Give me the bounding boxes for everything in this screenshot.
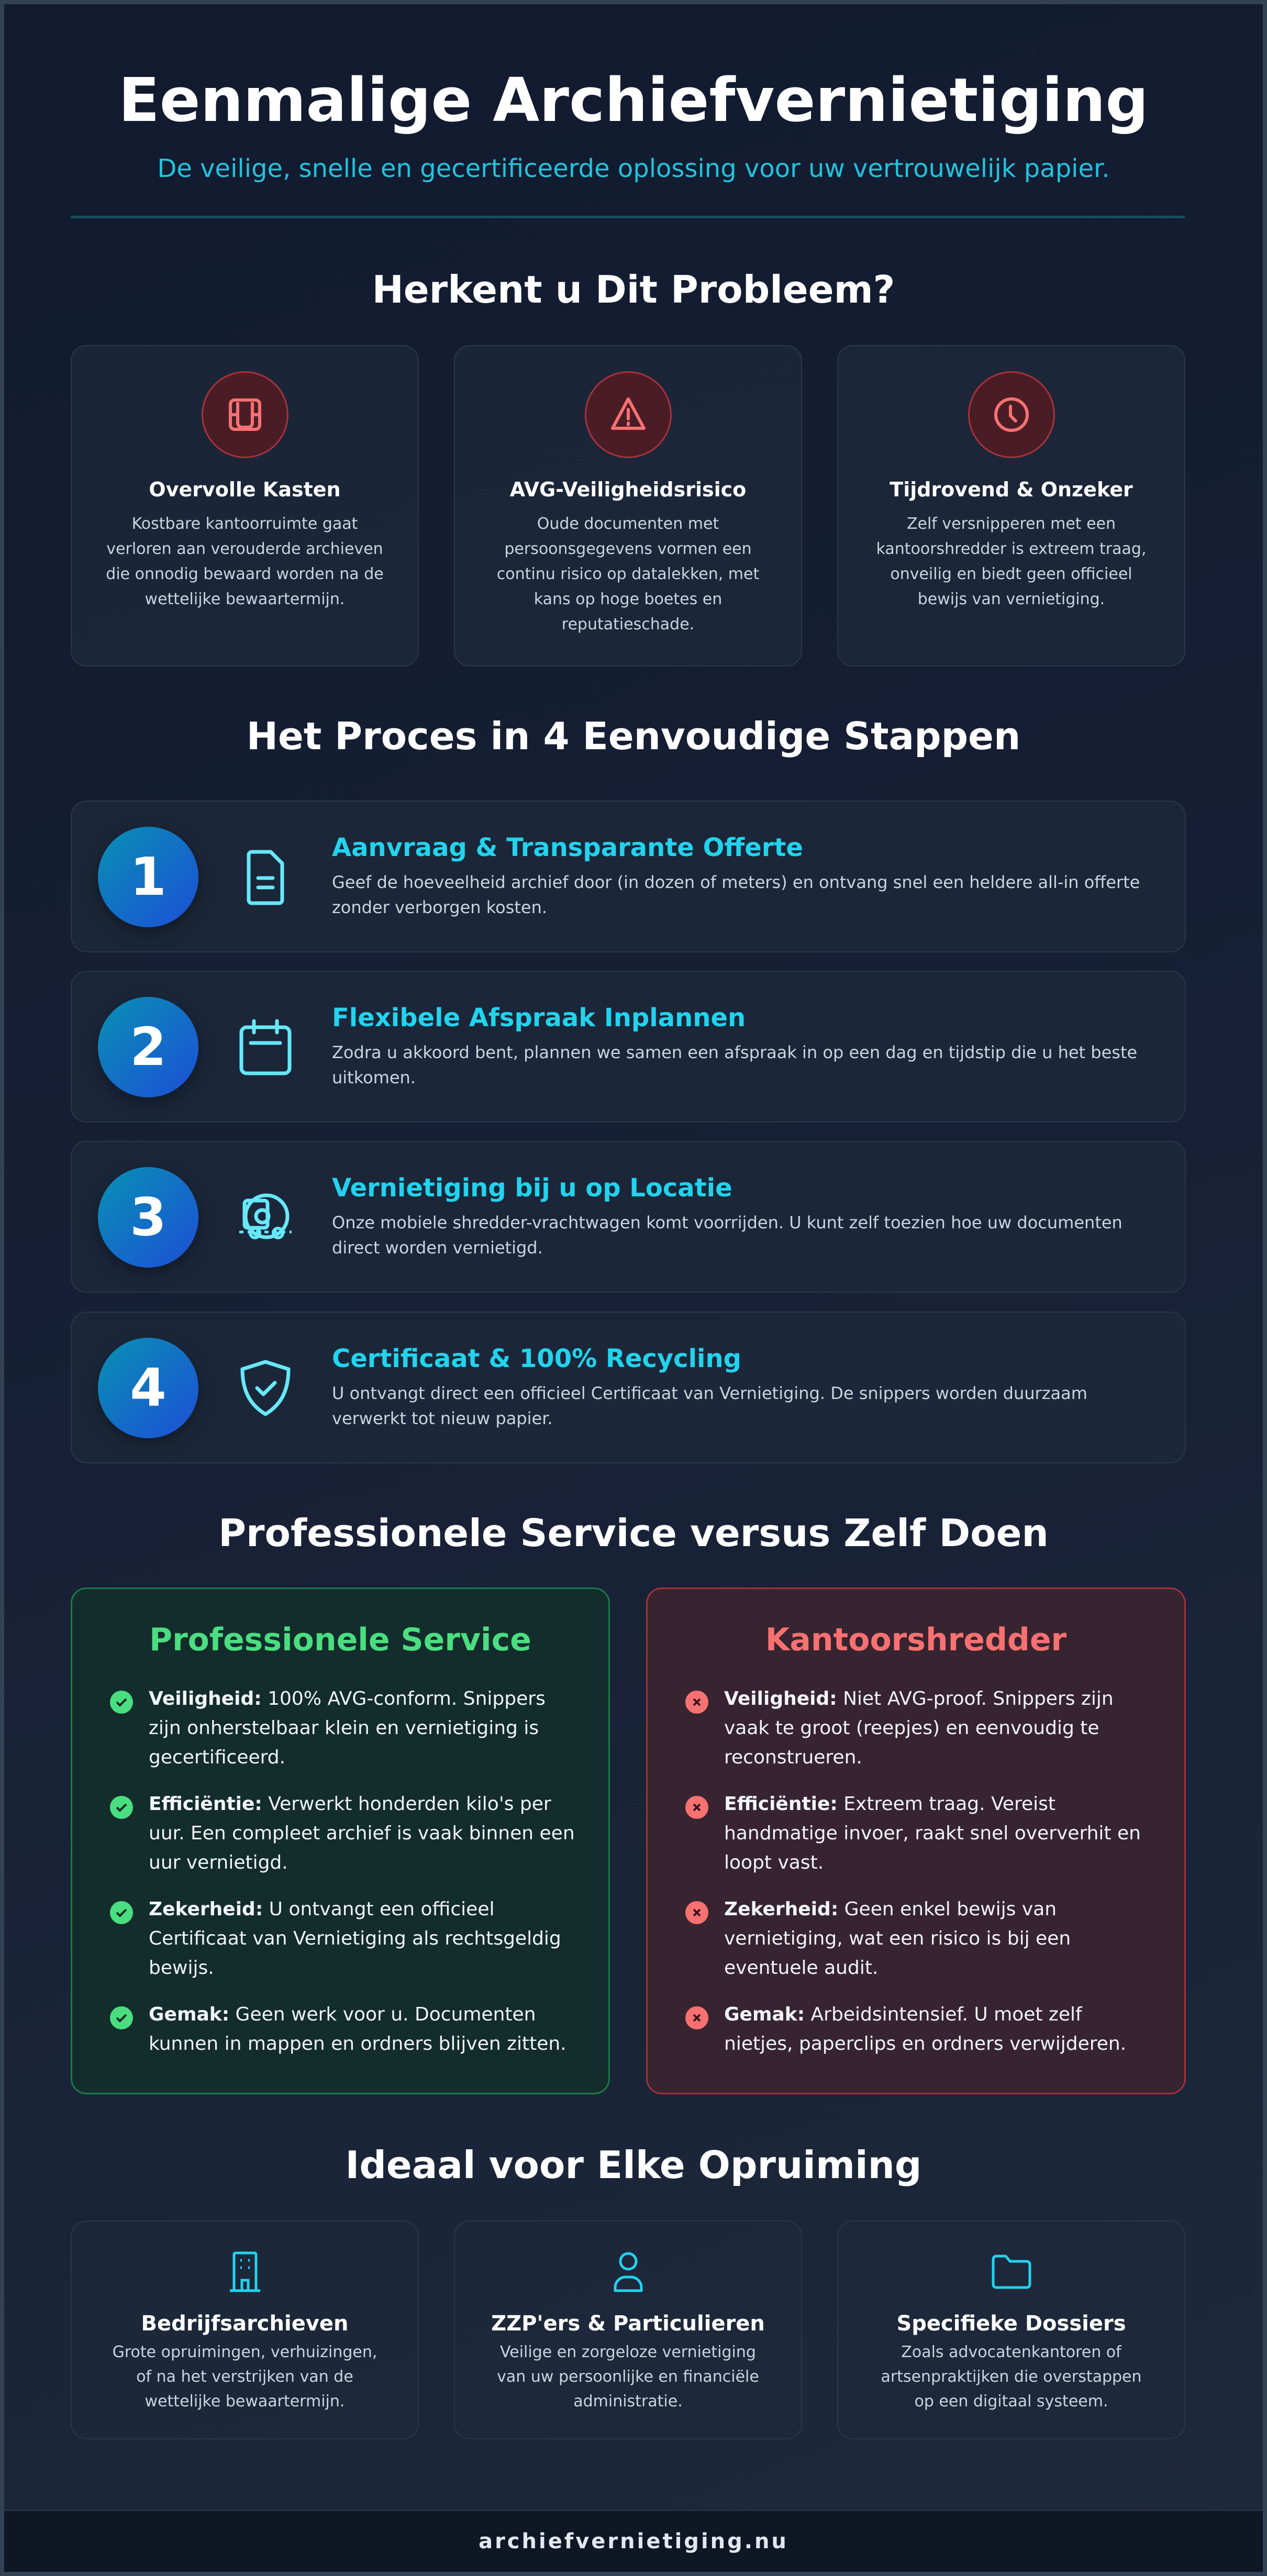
heading: process: Het Proces in 4 Eenvoudige Stappen <box>247 714 1020 758</box>
item list red: nietjes, paperclips en ordners verwijderen. <box>724 2033 1126 2055</box>
icon: folder <box>992 2255 1031 2289</box>
icon: clock <box>968 371 1054 458</box>
card: Bedrijfsarchieven <box>71 2220 419 2439</box>
item list red: Zekerheid: Geen enkel bewijs van vernietiging, wat een risico is bij een eventuele audit. <box>724 1898 1071 1979</box>
item list red: Veiligheid: Niet AVG-proof. Snippers zijn vaak te groot (reepjes) en eenvoudig te reconstrueren. <box>724 1688 1114 1768</box>
step 1 <box>71 801 1186 952</box>
step 1: Aanvraag & Transparante Offerte <box>332 833 803 862</box>
card: AVG <box>454 345 802 667</box>
panel: kantoorshredder <box>646 1587 1186 2094</box>
card: Overvolle Kasten: Kostbare kantoorruimte gaat verloren aan verouderde archieven die onnodig bewaard worden na de wettelijke bewaartermijn. <box>106 515 384 608</box>
heading: comparison: Professionele Service versus Zelf Doen <box>218 1511 1049 1555</box>
card: ZZP: van uw persoonlijke en financiële <box>497 2368 759 2386</box>
card: Dossiers <box>837 2220 1185 2439</box>
step 4: U ontvangt direct een officieel Certificaat van Vernietiging. De snippers worden duurzaam verwerkt tot nieuw papier. <box>332 1383 1087 1428</box>
step 4: Certificaat & 100% Recycling <box>332 1344 741 1373</box>
card: Overvolle Kasten: Overvolle Kasten <box>149 478 341 501</box>
icon: warning <box>584 371 671 458</box>
step 1: 1 <box>130 846 166 907</box>
panel: professional service: Professionele Service <box>149 1622 531 1658</box>
step 3 <box>71 1141 1186 1293</box>
card: ZZP <box>454 2220 802 2439</box>
icon: cabinet <box>201 371 288 458</box>
panel: steps <box>71 801 1186 1463</box>
step 2: Flexibele Afspraak Inplannen <box>332 1003 746 1032</box>
panel: use case cards <box>71 2220 1185 2439</box>
item list green: Zekerheid: U ontvangt een officieel Certificaat van Vernietiging als rechtsgeldig bewijs. <box>149 1898 561 1979</box>
card: Bedrijfsarchieven: wettelijke bewaartermijn. <box>145 2392 344 2411</box>
card: Tijdrovend <box>837 345 1185 667</box>
item list green: Gemak: Geen werk voor u. Documenten kunnen in mappen en ordners blijven zitten. <box>149 2004 566 2055</box>
item list red <box>685 1688 1141 2055</box>
step 2: Zodra u akkoord bent, plannen we samen een afspraak in op een dag en tijdstip die u het beste uitkomen. <box>332 1042 1137 1087</box>
step 3: Onze mobiele shredder-vrachtwagen komt voorrijden. U kunt zelf toezien hoe uw documenten direct worden vernietigd. <box>332 1213 1122 1258</box>
icon: building <box>230 2251 260 2292</box>
icon: shield <box>241 1360 290 1416</box>
card: Dossiers: Zoals advocatenkantoren of <box>901 2343 1121 2361</box>
step 2 <box>71 971 1186 1123</box>
step 3: 3 <box>130 1186 166 1248</box>
footer: archiefvernietiging.nu <box>479 2529 788 2553</box>
item list green: Veiligheid: 100% AVG-conform. Snippers zijn onherstelbaar klein en vernietiging is gecertificeerd. <box>149 1688 546 1768</box>
card: Tijdrovend: Zelf versnipperen met een kantoorshredder is extreem traag, onveilig en biedt geen officieel bewijs van vernietiging. <box>876 515 1146 608</box>
card: ZZP: administratie. <box>573 2392 683 2411</box>
item list red: Gemak: Arbeidsintensief. U moet zelf <box>724 2004 1082 2025</box>
step 4 <box>71 1312 1186 1463</box>
title: Eenmalige Archiefvernietiging <box>118 65 1149 136</box>
heading: use cases: Ideaal voor Elke Opruiming <box>346 2143 921 2187</box>
item list green <box>110 1688 575 2055</box>
card: Bedrijfsarchieven: of na het verstrijken van de <box>136 2368 353 2386</box>
icon: truck <box>239 1194 292 1239</box>
icon: person <box>614 2252 643 2292</box>
step 4: 4 <box>130 1357 166 1418</box>
step 1: Geef de hoeveelheid archief door (in dozen of meters) en ontvang snel een heldere all-in offerte zonder verborgen kosten. <box>332 872 1140 917</box>
panel: kantoorshredder: Kantoorshredder <box>765 1622 1066 1658</box>
step 3: Vernietiging bij u op Locatie <box>332 1173 732 1203</box>
panel: problem cards <box>71 345 1185 667</box>
step 2: 2 <box>130 1016 166 1078</box>
footer <box>4 2510 1263 2572</box>
item list green: Efficiëntie: Verwerkt honderden kilo's per uur. Een compleet archief is vaak binnen een uur vernietigd. <box>149 1793 575 1873</box>
card: ZZP: ZZP'ers & Particulieren <box>491 2312 765 2336</box>
card: Tijdrovend: Tijdrovend & Onzeker <box>890 478 1133 501</box>
card: Overvolle Kasten <box>71 345 419 667</box>
icon: document <box>247 850 284 905</box>
heading: problems: Herkent u Dit Probleem? <box>372 268 895 312</box>
icon: calendar <box>240 1019 291 1075</box>
card: AVG: AVG-Veiligheidsrisico <box>510 478 746 501</box>
card: Dossiers: artsenpraktijken die overstappen <box>881 2368 1142 2386</box>
card: Dossiers: Specifieke Dossiers <box>896 2312 1126 2336</box>
card: Bedrijfsarchieven: Grote opruimingen, verhuizingen, <box>113 2343 377 2361</box>
card: ZZP: Veilige en zorgeloze vernietiging <box>500 2343 756 2361</box>
card: Bedrijfsarchieven: Bedrijfsarchieven <box>141 2312 349 2336</box>
card: Dossiers: op een digitaal systeem. <box>914 2392 1108 2411</box>
card: AVG: Oude documenten met persoonsgegevens vormen een continu risico op datalekken, met kans op hoge boetes en reputatieschade. <box>497 515 759 634</box>
panel: professional service <box>71 1587 610 2094</box>
subtitle: De veilige, snelle en gecertificeerde oplossing voor uw vertrouwelijk papier. <box>157 154 1110 183</box>
item list red: Efficiëntie: Extreem traag. Vereist handmatige invoer, raakt snel oververhit en loopt vast. <box>724 1793 1141 1873</box>
